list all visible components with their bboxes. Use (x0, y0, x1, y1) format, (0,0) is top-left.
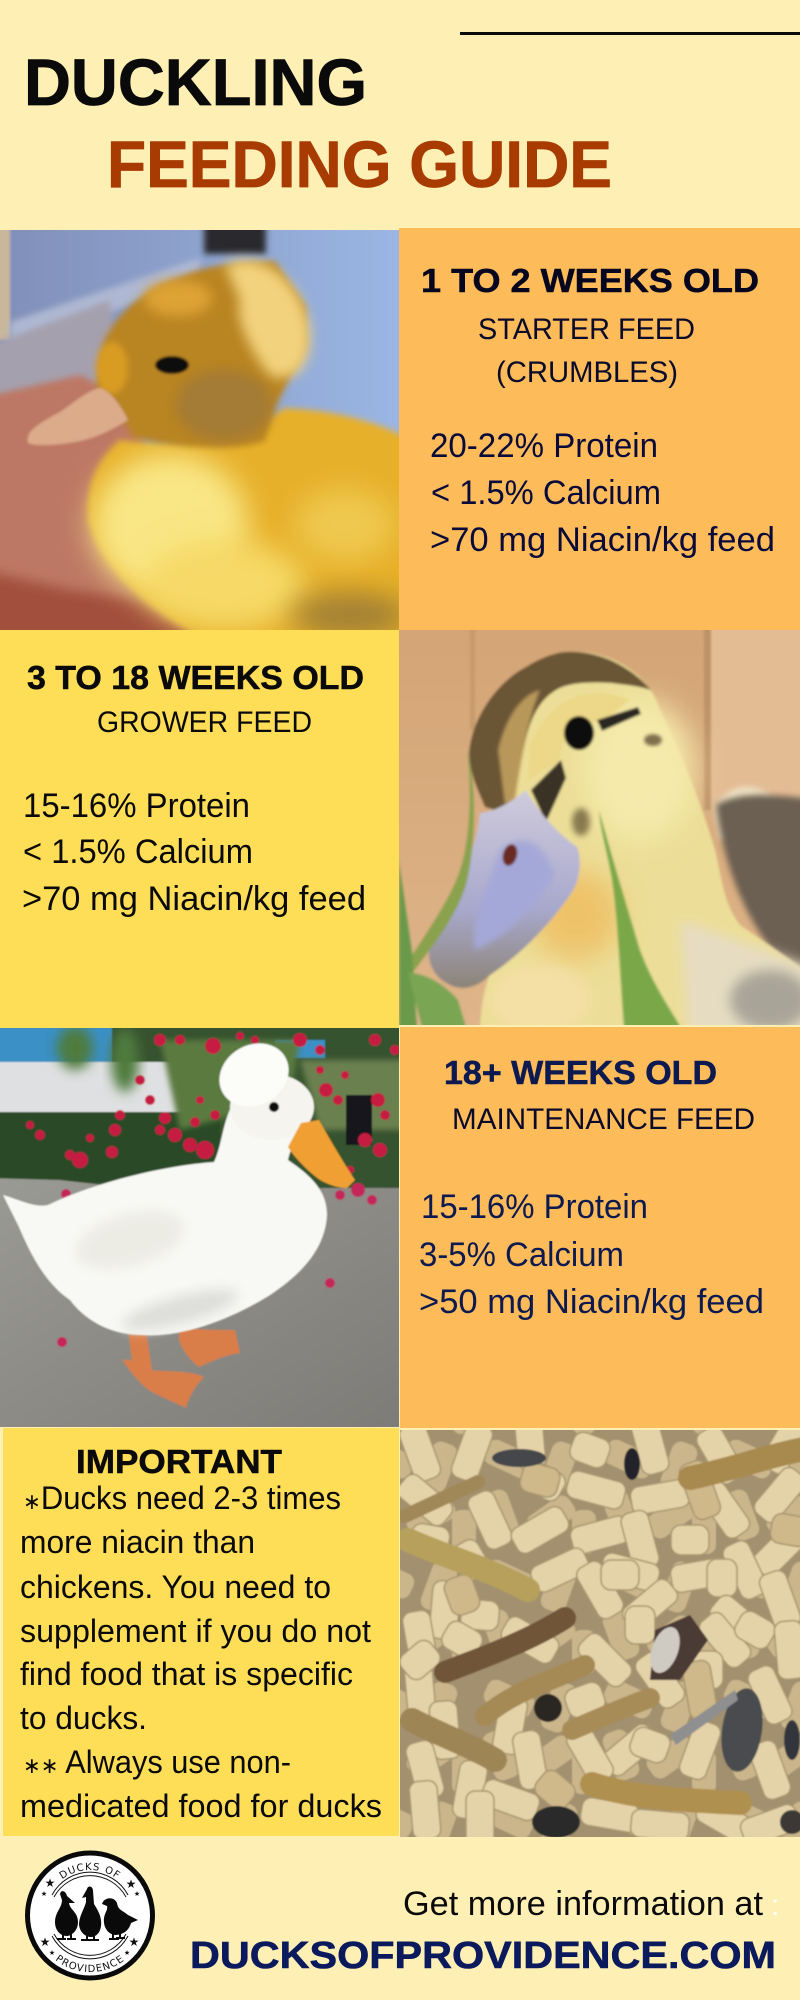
badge text: PROVIDENCE (56, 1954, 124, 1972)
nutrient list: >70 mg Niacin/kg feed (22, 880, 366, 918)
badge stars: ★ (126, 1877, 136, 1891)
note text: ∗∗ Always use non- (23, 1744, 291, 1780)
footer prompt: : (771, 1889, 779, 1922)
photo: yellow duckling (0, 230, 399, 630)
nutrient list (22, 787, 366, 918)
heading: 18+ weeks old: 18+ WEEKS OLD (444, 1054, 717, 1091)
feed type: grower: GROWER FEED (97, 706, 312, 739)
heading: 3 to 18 weeks old: 3 TO 18 WEEKS OLD (27, 659, 364, 696)
panel: 18+ weeks (400, 1027, 800, 1428)
heading: important: IMPORTANT (76, 1443, 282, 1480)
badge stars: ★ (129, 1935, 139, 1949)
title: FEEDING GUIDE (107, 127, 612, 201)
nutrient list: 20-22% Protein (430, 427, 658, 465)
nutrient list: >70 mg Niacin/kg feed (430, 521, 775, 559)
note text: more niacin than (20, 1524, 255, 1560)
panel: 3 to 18 weeks (0, 630, 399, 1028)
badge stars: ★ (41, 1890, 47, 1898)
nutrient list: < 1.5% Calcium (23, 833, 253, 871)
note text: chickens. You need to (20, 1569, 331, 1605)
photo: feed pellets and larvae (390, 1410, 800, 1850)
photo: white crested duck (0, 1018, 410, 1440)
nutrient list: 3-5% Calcium (419, 1236, 624, 1274)
nutrient list (419, 1188, 764, 1321)
three duck silhouettes (55, 1887, 138, 1941)
badge stars: ★ (40, 1935, 50, 1949)
badge stars (40, 1876, 140, 1957)
panel: 1 to 2 weeks (399, 228, 800, 630)
panel: important note (3, 1428, 399, 1836)
footer prompt: Get more information at (403, 1885, 764, 1923)
title: DUCKLING (24, 45, 367, 119)
nutrient list (430, 427, 775, 559)
photo: mallard duckling (399, 630, 800, 1025)
note text: medicated food for ducks (20, 1788, 382, 1824)
heading: 1 to 2 weeks old: 1 TO 2 WEEKS OLD (421, 262, 759, 299)
badge text (56, 1862, 124, 1972)
footer website: DUCKSOFPROVIDENCE.COM (190, 1935, 776, 1977)
note text: to ducks. (20, 1700, 147, 1736)
nutrient list: < 1.5% Calcium (431, 474, 661, 512)
feed type: starter: (CRUMBLES) (496, 356, 678, 389)
badge stars: ★ (45, 1876, 55, 1890)
top accent line (460, 32, 800, 35)
logo: ducks of providence badge (25, 1850, 155, 1980)
nutrient list: 15-16% Protein (23, 787, 250, 825)
note text: ∗Ducks need 2-3 times (23, 1480, 341, 1516)
note text: find food that is specific (20, 1656, 353, 1692)
badge stars: ★ (124, 1949, 130, 1957)
badge stars: ★ (49, 1949, 55, 1957)
note text (20, 1480, 382, 1824)
badge stars: ★ (134, 1890, 140, 1898)
feed type: maintenance: MAINTENANCE FEED (452, 1103, 755, 1136)
feed type: starter (478, 313, 695, 389)
note text: supplement if you do not (20, 1613, 371, 1649)
title (24, 45, 612, 201)
nutrient list: 15-16% Protein (421, 1188, 648, 1226)
feed type: starter: STARTER FEED (478, 313, 695, 346)
nutrient list: >50 mg Niacin/kg feed (419, 1283, 764, 1321)
badge text: DUCKS OF (59, 1862, 120, 1879)
